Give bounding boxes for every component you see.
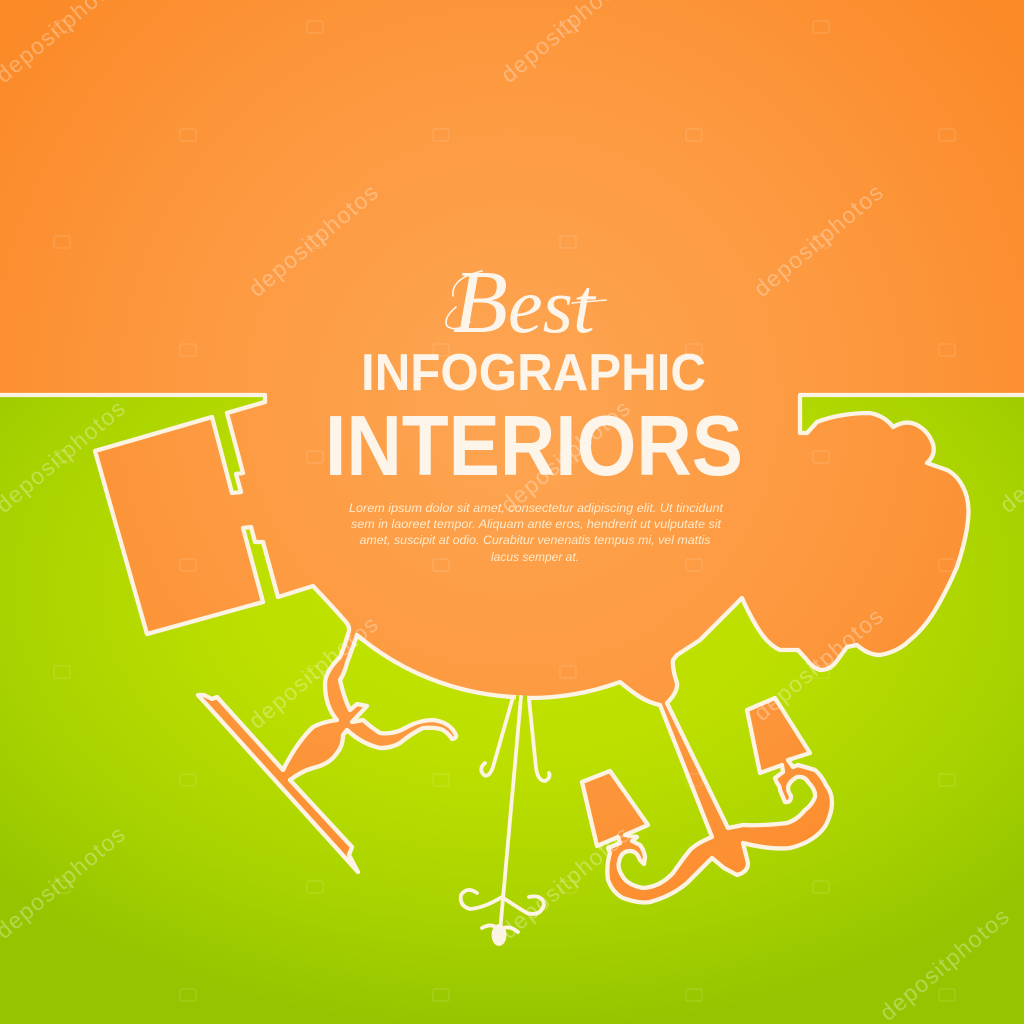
ornament curls xyxy=(461,890,544,914)
watermark text: depositphotos xyxy=(749,179,888,302)
lower ornament curls xyxy=(482,925,518,932)
title block xyxy=(325,253,743,564)
line 3: amet, suscipit at odio. Curabitur venenatis tempus mi, vel mattis xyxy=(360,535,711,547)
watermark text: depositphotos xyxy=(496,395,635,518)
heading: INTERIORS: INTERIORS xyxy=(325,399,743,494)
word: Best: Best xyxy=(453,253,597,352)
right hook xyxy=(529,699,550,781)
body copy xyxy=(349,503,724,564)
watermark text: depositphotos xyxy=(244,179,383,302)
line 2: sem in laoreet tempor. Aliquam ante eros, hendrerit ut vulputate sit xyxy=(351,519,722,531)
icon: hanging hooks and rod xyxy=(461,697,550,944)
letter flourish xyxy=(446,271,606,329)
watermark text: depositphotos xyxy=(496,821,635,944)
gap in the arc around the chandelier rod xyxy=(516,695,527,701)
line 4: lacus semper at. xyxy=(491,552,579,564)
centre rod xyxy=(500,697,521,932)
line 1: Lorem ipsum dolor sit amet, consectetur adipiscing elit. Ut tincidunt xyxy=(349,503,724,515)
left hook xyxy=(481,697,513,776)
watermark text: depositphotos xyxy=(875,903,1014,1024)
ornament bulb xyxy=(494,926,504,944)
watermark text: depositphotos xyxy=(244,611,383,734)
heading: INFOGRAPHIC: INFOGRAPHIC xyxy=(361,344,706,402)
script heading xyxy=(446,253,606,352)
green background xyxy=(0,390,1024,1024)
watermark text: depositphotos xyxy=(749,603,888,726)
